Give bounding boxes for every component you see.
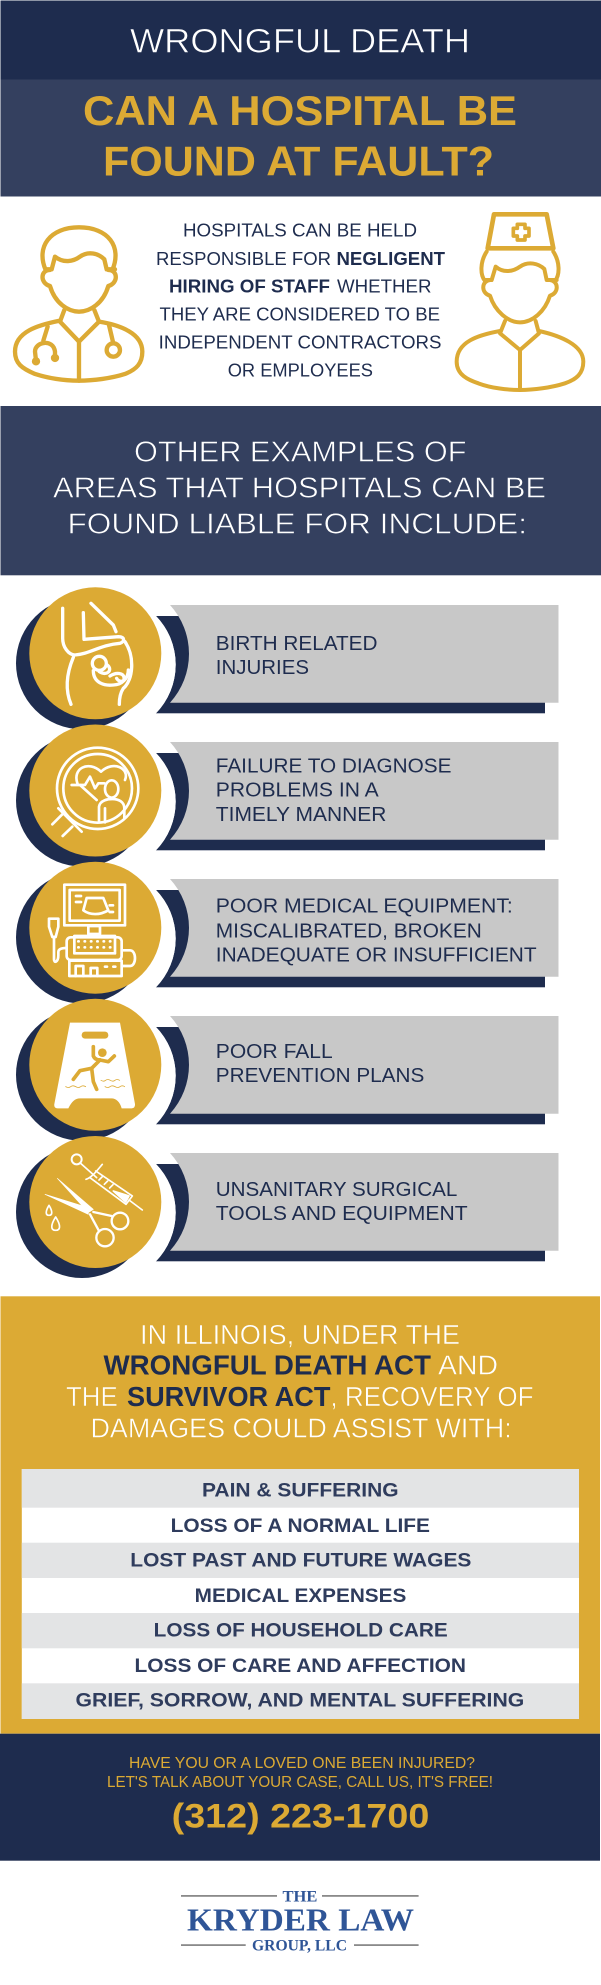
item text: INJURIES <box>216 657 309 679</box>
damages table: MEDICAL EXPENSES <box>195 1585 406 1607</box>
call to action text <box>107 1755 493 1791</box>
panel heading text: WRONGFUL DEATH ACT <box>104 1350 431 1381</box>
damages table: PAIN & SUFFERING <box>202 1480 399 1502</box>
heading text: FOUND LIABLE FOR INCLUDE: <box>68 508 527 540</box>
heading text: OTHER EXAMPLES OF <box>134 437 466 469</box>
item text <box>216 756 452 826</box>
intro text block: RESPONSIBLE FOR <box>156 248 331 269</box>
panel: call to action <box>0 1734 600 1861</box>
icon: magnifier over heart and patient <box>52 748 138 836</box>
icon: syringe, scissors and drops <box>45 1154 142 1246</box>
panel heading text: DAMAGES COULD ASSIST WITH: <box>90 1412 512 1443</box>
logo: the kryder law group: GROUP, LLC <box>252 1938 347 1955</box>
intro text block: HIRING OF STAFF <box>169 276 330 297</box>
icon: doctor with stethoscope <box>15 227 142 381</box>
panel heading text: IN ILLINOIS, UNDER THE <box>140 1319 460 1350</box>
damages table: GRIEF, SORROW, AND MENTAL SUFFERING <box>76 1690 524 1712</box>
icon: nurse with cap <box>457 214 583 390</box>
list item 5: unsanitary surgical tools <box>16 1136 558 1283</box>
intro text block: HOSPITALS CAN BE HELD <box>183 220 417 241</box>
item text <box>216 896 537 966</box>
list item 1: birth related injuries <box>16 587 558 735</box>
damages table: LOSS OF HOUSEHOLD CARE <box>154 1620 448 1642</box>
list item 3: poor medical equipment <box>16 862 558 1009</box>
item text: POOR MEDICAL EQUIPMENT: <box>216 896 513 918</box>
intro text block <box>156 220 446 381</box>
panel heading text: AND <box>438 1350 498 1381</box>
panel heading text: THE <box>66 1381 118 1412</box>
list item 4: poor fall prevention <box>16 999 558 1146</box>
panel heading text: SURVIVOR ACT <box>127 1381 331 1412</box>
item text: BIRTH RELATED <box>216 633 378 655</box>
panel: illinois damages <box>0 1296 600 1734</box>
item text: PROBLEMS IN A <box>216 780 379 802</box>
item text <box>216 1041 424 1087</box>
call to action text: LET'S TALK ABOUT YOUR CASE, CALL US, IT'S FREE! <box>107 1774 493 1791</box>
item text: INADEQUATE OR INSUFFICIENT <box>216 944 537 966</box>
intro text block: THEY ARE CONSIDERED TO BE <box>160 304 440 325</box>
item text: UNSANITARY SURGICAL <box>216 1179 457 1201</box>
section heading band: other examples <box>0 406 601 575</box>
item text: MISCALIBRATED, BROKEN <box>216 920 482 942</box>
intro text block: INDEPENDENT CONTRACTORS <box>159 332 441 353</box>
damages table: LOSS OF A NORMAL LIFE <box>171 1515 430 1537</box>
icon: ultrasound machine <box>49 885 135 976</box>
item text: TOOLS AND EQUIPMENT <box>216 1203 468 1225</box>
logo: the kryder law group: THE <box>282 1888 317 1905</box>
headline line 2: FOUND AT FAULT? <box>103 138 494 185</box>
item text: POOR FALL <box>216 1041 333 1063</box>
item text <box>216 633 378 679</box>
intro text block: WHETHER <box>337 276 432 297</box>
call to action text: HAVE YOU OR A LOVED ONE BEEN INJURED? <box>129 1755 475 1772</box>
logo: the kryder law group <box>181 1888 419 1955</box>
damages table: LOSS OF CARE AND AFFECTION <box>134 1655 466 1677</box>
panel heading text: , RECOVERY OF <box>330 1381 534 1412</box>
heading text: AREAS THAT HOSPITALS CAN BE <box>53 473 546 505</box>
intro text block: OR EMPLOYEES <box>228 360 373 381</box>
panel heading text <box>66 1319 534 1443</box>
title band <box>0 0 601 80</box>
logo: the kryder law group: KRYDER LAW <box>187 1902 414 1938</box>
title: wrongful death: WRONGFUL DEATH <box>130 23 470 61</box>
item text <box>216 1179 468 1225</box>
headline band <box>0 80 601 196</box>
item text: TIMELY MANNER <box>216 804 386 826</box>
heading text <box>53 437 546 540</box>
intro text block: NEGLIGENT <box>336 248 446 269</box>
damages table <box>22 1469 579 1719</box>
damages table: LOST PAST AND FUTURE WAGES <box>130 1550 471 1572</box>
icon: wet floor caution sign <box>54 1023 135 1108</box>
item text: PREVENTION PLANS <box>216 1065 424 1087</box>
icon: pregnant abdomen <box>63 603 132 704</box>
headline line 1: CAN A HOSPITAL BE <box>83 87 517 134</box>
list item 2: failure to diagnose <box>16 724 558 872</box>
phone number: (312) 223-1700 <box>172 1798 429 1836</box>
item text: FAILURE TO DIAGNOSE <box>216 756 452 778</box>
